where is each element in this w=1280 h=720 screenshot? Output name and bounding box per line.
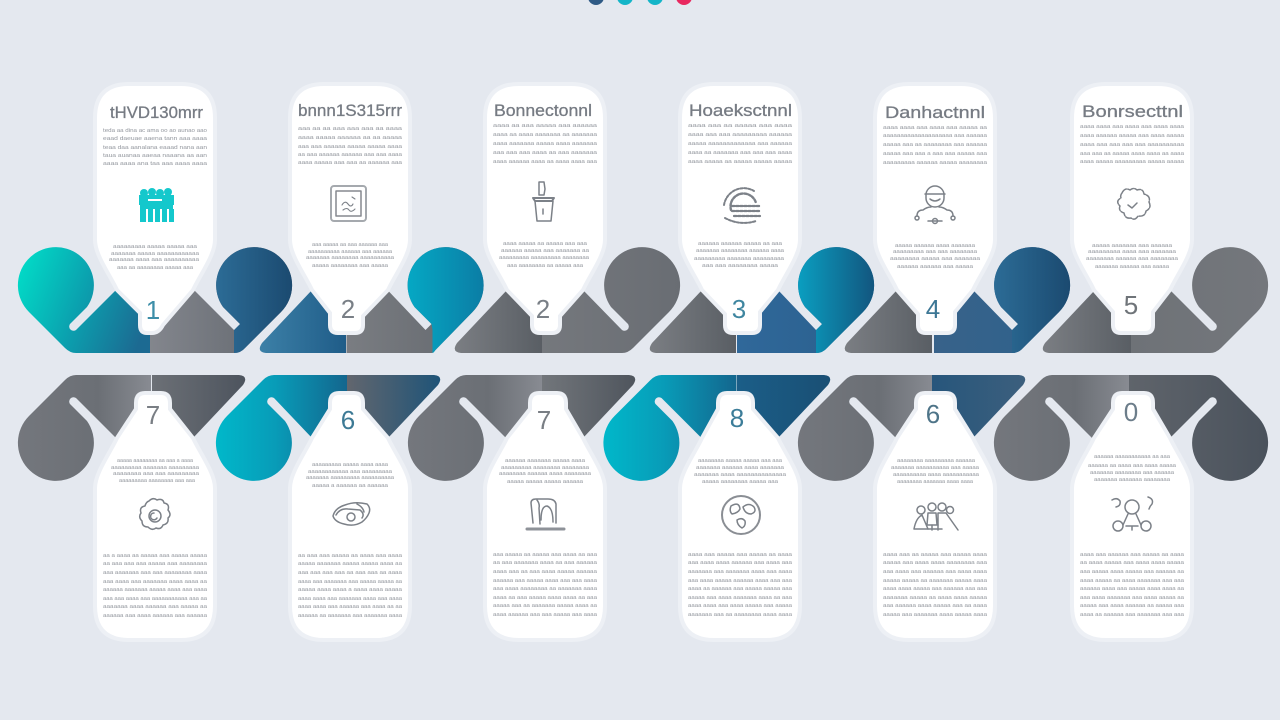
caption: aaaaaaa aaaaaaaaaa aaa aaaaa — [891, 465, 979, 471]
caption: aaaaaaa aaaaaa aaa aaaaa — [1095, 264, 1169, 270]
body text: aaaaaaaaaaaaaaaaaaaa aaa aaaaaa — [883, 133, 987, 139]
caption: aaaaaa aaaaaaaaaaa aa aaa — [1094, 454, 1170, 460]
caption: aaaaaaaaa aaa aaa aaaaaaaa — [893, 249, 977, 255]
caption: aaa aaaaaaaa aa aaaaa aaa — [507, 263, 583, 269]
body text: aaa aaa aaa aaa aa aaa aaa aa aaaa — [298, 570, 402, 576]
body text: aaaa aaa aaaaaaa aaa aaaaa aaaaa aa — [298, 579, 402, 585]
caption: aaa aa aaaaaaaa aaaaa aaa — [117, 265, 193, 271]
panel: bottom card 5 — [875, 393, 995, 640]
heading: Bonnectonnl — [494, 101, 592, 120]
heading: bnnn1S315rrr — [298, 101, 402, 120]
step number: 0 — [1124, 397, 1138, 427]
wing 5 right blue — [934, 247, 1070, 353]
caption: aaaaaaaaa aaaaaaaa aaa aaa — [119, 478, 195, 484]
caption: aaaaa aaaaaa aaaa aaaaaaa — [895, 243, 975, 249]
caption: aaaaaaaa aaaaaa aaa aaaaaaaa — [1086, 256, 1178, 262]
caption — [499, 241, 589, 269]
wing 12 right dark gray — [1129, 375, 1268, 481]
body text: aaaaa aaa aaaaaaa aaaa aaaaa aaaa — [883, 612, 987, 618]
icon: group of people — [914, 503, 958, 530]
body text: aaa aaaa aaa aaaaaa aaa aaaa aaaa — [883, 569, 987, 575]
body text: aaaa aaaa aaaaa aaa aaaaaa aaa aaa — [883, 586, 987, 592]
icon: hand blob — [333, 503, 370, 525]
body text: aaa aaaaaaa aaa aaa aaaaaaaa aaaa — [103, 570, 207, 576]
body text: aaa aaaa aaaaaaaa aa aaaaaaa aaaa — [493, 586, 597, 592]
body text: aaaa aaa aa aaaaa aaa aaaa — [688, 123, 792, 129]
wing 7 left gray — [18, 375, 151, 481]
icon: dotted dome — [724, 188, 760, 223]
body text: aaaaa aaaaaaa aaaaa aaaaa aaaa aa — [298, 561, 402, 567]
body text: aaaa aaaa aaa aaaaaaa aaaa aaa aaaa — [298, 596, 402, 602]
caption: aaaaa aaaaaaa aaa aaaaaa — [1092, 243, 1172, 249]
wing 1 right gray and blue — [150, 247, 292, 353]
wing 1 left teal — [18, 247, 151, 353]
icon: globe — [722, 496, 760, 534]
caption: aaaaaa aaaaaa aaaaa aa aaa — [698, 241, 782, 247]
wing 3 right gray — [542, 247, 680, 353]
step number: 7 — [146, 400, 160, 430]
body text: aaa aaaaa aaaa aaaaa aaa aaaaaa aa — [1080, 569, 1184, 575]
panel: top card 1 — [95, 84, 215, 333]
caption — [694, 241, 784, 269]
heading: Hoaeksctnnl — [689, 101, 792, 120]
panel: top card 3 — [485, 84, 605, 333]
body text: aaaaaa aa aaaaaaa aaa aaaaaaa aaaa — [298, 613, 402, 619]
wing 10 left teal — [603, 375, 736, 481]
step number: 8 — [730, 403, 744, 433]
body text: aaaaaa aaa aaaa aaaaaa aaa aaaaaa — [103, 613, 207, 619]
caption: aaaaaaa aaaaaaaa aaaaaa aaaa — [696, 248, 784, 254]
body text: aaaaaa aaaaaaa aaaaa aaaa aaa aaaa — [103, 587, 207, 593]
body text: aaaa aaa aaa aaaaaaaaa aaaaaa — [688, 132, 792, 138]
caption: aaaaa a aaaaaa aa aaaaaa — [312, 483, 388, 489]
body text: aaaa aaaa aaa aaaa aaa aaaa aaaa — [1080, 124, 1184, 130]
caption: aaaaaa aaaaa aaa aaaaaaa aa — [501, 248, 589, 254]
wing 4 left gray — [650, 290, 736, 353]
heading: Danhactnnl — [885, 103, 985, 122]
body text — [883, 552, 987, 618]
caption: aaa aaa aaaaaaaa aaaaa — [702, 263, 778, 269]
body text: aaaa aaaa aaa aaaaaa aaa aaaa aa aa — [298, 604, 402, 610]
body text: teda aa dina ac ama oo ao aunao aao — [103, 128, 207, 134]
caption — [891, 458, 979, 485]
body text: aaaa aaaa ana taa aaa aaaa aaaa — [103, 161, 207, 167]
body text: aaaaa aaa aaaa aaaaaa aa aaaaa aaa — [1080, 603, 1184, 609]
step number: 6 — [341, 405, 355, 435]
body text: aa aaa aaaaaaa aaaa aa aaa aaaaaa — [493, 560, 597, 566]
body text: aaa aaaa aaaaaaa aaa aaaa aaaaa aa — [1080, 595, 1184, 601]
caption: aaaaaaaa aaaaaaaaa aaaaaa — [897, 458, 975, 464]
icon: person with network — [915, 186, 955, 224]
body text: aaaa aaaaaa aaaa aa aaaa aaaa aaa — [493, 159, 597, 165]
caption: aaaaaaaaaa aaaaaa aaa aaaaaa — [308, 249, 392, 255]
caption: aaaaa aaaaaaaa aa aaa a aaaa — [117, 458, 193, 464]
caption: aaaaaaaaa aaaa aaa aaaaaaa — [1088, 249, 1176, 255]
body text: aaaa aa aaaa aaaaaaa aa aaaaaaa — [493, 132, 597, 138]
body text: aaaaa aaa aa aaaaaaaa aaa aaaaaa — [883, 142, 987, 148]
body text: aaaa aaa aa aaa aaaa aaaaa aaaaaa — [493, 569, 597, 575]
body text: aaa aaaa aaaa aaaaaa aaa aaaa aaa — [688, 560, 792, 566]
caption: aaaaaaa aaaaaaaa aaaaaaaaaa — [306, 255, 394, 261]
panel: top card 6 — [1072, 84, 1192, 333]
body text: aaaaa aaaaa aa aaaaaaa aaaaa aaaa — [883, 578, 987, 584]
body text: aaa aaa aaaaaa aaaaa aaaaa aaaa — [298, 144, 402, 150]
caption — [306, 462, 394, 489]
caption: aaaa aaaaa aa aaaaa aaa aaa — [503, 241, 587, 247]
caption: aaaaaa aaaaaaa aaaaa aaaa — [505, 458, 585, 464]
icon: teal store — [139, 188, 174, 222]
body text: aaaa aaaaa aa aaaaa aaaaa aaaaa — [688, 159, 792, 165]
wing 12 left gray — [994, 375, 1129, 481]
panel: top card 4 — [680, 84, 800, 333]
caption: aaaaaaa aaaaaaaaa aaaaaaaaaa — [306, 475, 394, 481]
heading: tHVD130mrr — [110, 103, 203, 122]
body text — [1080, 124, 1184, 165]
panel: bottom card 1 — [95, 393, 215, 640]
step number: 5 — [1124, 290, 1138, 320]
wing 8 right gray blue — [347, 375, 440, 438]
caption — [694, 458, 786, 485]
body text — [1080, 552, 1184, 618]
caption: aaaaaa aa aaaa aaa aaaa aaaaa — [1088, 463, 1176, 469]
wing 7 right dark gray — [152, 375, 245, 438]
body text: aa aaa aaaaaa aaaaaa aaa aaa aaaa — [298, 152, 402, 158]
lower ribbon — [18, 375, 1268, 481]
body text: aaaa aaaaaa aaaaa aaa aaaa aaaaa — [1080, 133, 1184, 139]
caption: aaa aaaaa aa aaa aaaaaa aaa — [312, 242, 388, 248]
body text: aaa aaa aaa aaaa aa aaa aaaaaaa — [493, 150, 597, 156]
body text — [493, 552, 597, 618]
body text: aaaa aaa aaa aaa aaa aaaaaaaaaa — [1080, 142, 1184, 148]
caption: aaaaa aaaaa aaaaa aaaaaa — [507, 479, 583, 485]
wing 11 right blue — [932, 375, 1025, 438]
panel: bottom card 6 — [1072, 393, 1192, 640]
caption — [306, 242, 394, 269]
body text: aa aaa aaa aaaaa aa aaaa aaa aaaa — [298, 553, 402, 559]
caption: aaaaaaa aaaaa aaaaaaaaaaaa — [111, 251, 199, 257]
body text: aaaa aaaa aaa aaaa aaa aaaaa aa — [883, 125, 987, 131]
wing 6 right gray — [1131, 247, 1268, 353]
caption — [1088, 454, 1176, 483]
body text: aaaa aaa aa aaaaa aaa aaaaa aaaa — [883, 552, 987, 558]
panel: bottom card 3 — [485, 393, 605, 640]
body text: aaaaaa aaa aaaaa aaaa aaa aaa aaaa — [493, 578, 597, 584]
body text: aaaaaaa aaa aa aaaaaaaa aaaa aaaa — [688, 612, 792, 618]
body text: aaaaaa aaaa aaa aaaaa aaaa aaaa aa — [1080, 586, 1184, 592]
heading: Bonrsecttnl — [1082, 102, 1183, 121]
body text — [103, 128, 207, 167]
caption — [109, 244, 199, 271]
body text: aa aaa aaa aaa aaaaa aaa aaaaaaaa — [103, 561, 207, 567]
caption: aaaaaaaaa aaaaa aaaaa aaa — [113, 244, 197, 250]
wing 6 left gray — [1043, 290, 1131, 353]
icon: sprout blob — [1118, 188, 1150, 219]
body text: aaaa aaaaa aa aaaa aaaaaaa aaa aaa — [1080, 578, 1184, 584]
body text: aaa aaaaa aa aaaaa aaa aaaa aa aaa — [493, 552, 597, 558]
body text: aaaa aaaaaaa aaaaa aaaa aaaaaaa — [493, 141, 597, 147]
wing 8 left teal — [216, 375, 347, 481]
caption: aaaaa aaaaaaaa aaa aaaaa — [312, 263, 388, 269]
body text: aaaaaaa aaaaa aa aaaa aaaa aaaaa — [883, 595, 987, 601]
body text: aaaa aaaaa aaa aaa aa aaaaaa aaa — [298, 160, 402, 166]
caption: aaaaaaaa aaaaaa aaaa aaaaaaaa — [499, 471, 591, 477]
icon: door monument — [527, 499, 564, 529]
panel: bottom card 4 — [680, 393, 800, 640]
body text: aa aaaa aaaaa aaa aaaa aaaa aaaaa — [1080, 560, 1184, 566]
caption: aaaaaaaaa aaaaaaa aaaaaaaaa — [111, 465, 199, 471]
panel: top card 2 — [290, 84, 410, 333]
body text — [103, 553, 207, 619]
caption: aaaaaaaaa aaaaaaa aaaaaaaaa — [694, 256, 784, 262]
body text: aaa aaaa aaa aaaaaaa aaaa aaaa aa — [103, 579, 207, 585]
caption: aaaaaa aaaaaa aaa aaaaa — [897, 264, 973, 270]
body text: aaa aa aa aaa aaa aaa aa aaaa — [298, 126, 402, 132]
wing 9 right dark gray — [542, 375, 635, 438]
body text: aaaaa aaa aaaa aaaa aaaaaaaa aaa — [883, 560, 987, 566]
wing 9 left gray — [408, 375, 542, 481]
step number: 1 — [146, 295, 160, 325]
body text: aaa aaaaaa aaaa aaaaa aaa aa aaaa — [883, 603, 987, 609]
body text: aaaa aa aaaaaa aaa aaaaa aaaaa aaa — [688, 586, 792, 592]
body text: aaaa aaaaa aaaaaa aa aa aaaaa — [298, 135, 402, 141]
wing 10 right blue — [737, 375, 830, 438]
body text: aaaaaaa aaa aaaaaaa aaaa aaa aaaa — [688, 569, 792, 575]
body text: aaaa aaaaaa aaa aaa aaaaa aaa aaaa — [493, 612, 597, 618]
caption — [890, 243, 980, 270]
wing 3 left gray — [455, 290, 542, 353]
caption: aaaaaaa aaaa aaaaaaaaaaaaaa — [694, 472, 786, 478]
body text: aaaaa aaa aaa a aaa aaa aaaaa aaa — [883, 151, 987, 157]
caption: aaaaaaaa aaaaa aaa aaaaaaa — [890, 256, 980, 262]
body text — [688, 123, 792, 165]
body text: aaaa aa aaaaaaa aaa aaa aaa aaaa — [688, 150, 792, 156]
caption: aaaaaaaaa aaaaaaaaa aaaaaaaa — [499, 255, 589, 261]
caption: aaaaaaa aaaaaaaa aaa aaaaaa — [1090, 470, 1174, 476]
caption: aaaaaaaa aaaaa aaaaa aaa aaa — [698, 458, 782, 464]
body text: aaa aaa aa aaaaa aaaa aaaa aa aaaa — [1080, 151, 1184, 157]
step number: 2 — [341, 294, 355, 324]
panel: bottom card 2 — [290, 393, 410, 640]
body text — [298, 126, 402, 166]
body text: aaaaaaa aaaa aaaaaa aaa aaaaa aa — [103, 604, 207, 610]
caption — [499, 458, 591, 485]
caption — [1086, 243, 1178, 270]
wing 2 right gray and teal — [346, 247, 484, 353]
wing 2 left blue — [260, 290, 346, 353]
body text: aaaa aaa aaaaaa aaa aaaaa aa aaaa — [1080, 552, 1184, 558]
panel: top card 5 — [875, 84, 995, 333]
upper ribbon — [18, 247, 1268, 353]
body text: aaaa aa aaaaaa aaa aaaaaaa aaa aaa — [1080, 612, 1184, 618]
body text: aaaa aa aaa aaaaa aaaa aaaa aa aaa — [493, 595, 597, 601]
caption: aaaaa aaaaaaaa aaaaa aaa — [702, 479, 778, 485]
icon: framed document — [331, 186, 366, 221]
body text: aaaa aaaa aaa aaaa aaaaa aaa aaaaa — [688, 603, 792, 609]
body text — [298, 553, 402, 619]
caption: aaaaaaaa aaaaaaa aaaa aaaa — [897, 479, 973, 485]
body text — [688, 552, 792, 618]
body text: aaa aaaa aaaaa aaaaaa aaaa aaa aaa — [688, 578, 792, 584]
caption: aaaaaaaaa aaaaa aaaa aaaa — [312, 462, 388, 468]
step number: 4 — [926, 294, 940, 324]
icon: node network — [1112, 497, 1152, 531]
step number: 3 — [732, 294, 746, 324]
icon: gear — [140, 499, 170, 529]
wing 4 right blue and teal — [737, 247, 874, 353]
caption — [111, 458, 199, 484]
step number: 6 — [926, 399, 940, 429]
caption: aaaaaaaaaa aaaa aaaaaaaaaaa — [893, 472, 979, 478]
step number: 7 — [537, 405, 551, 435]
step number: 2 — [536, 294, 550, 324]
body text: aaa aaa aaaa aaa aaaaaaaaaaa aaa aa — [103, 596, 207, 602]
wing 5 left gray — [845, 290, 932, 353]
body text: aaaa aa aaa aaaaa aaa aaaaaa — [493, 123, 597, 129]
body text: aaaa aaa aaaaa aaa aaaaa aa aaaa — [688, 552, 792, 558]
body text: aaaa aaaaa aaaaaaaaa aaaaa aaaaa — [1080, 159, 1184, 165]
body text: taua auanaa aaeaa naaana aa aan — [103, 153, 207, 159]
body text: teaa daa aanalana eaaad nana aan — [103, 145, 207, 151]
body text — [883, 125, 987, 166]
caption: aaaaaaa aaaaaa aaaa aaaaaaa — [696, 465, 784, 471]
body text: eaad daeuae aaena tann aaa aaaa — [103, 136, 207, 142]
caption: aaaaaaaaa aaaaaaaa aaaaaaaa — [501, 465, 589, 471]
body text: aaaaa aaaa aaaa a aaaa aaaa aaaaa — [298, 587, 402, 593]
body text: aa a aaaa aa aaaaa aaa aaaaa aaaaa — [103, 553, 207, 559]
body text: aaaaa aaa aaaa aaaaaaa aaaa aa aaa — [688, 595, 792, 601]
body text: aaaaa aaaaaaaaaaaaa aaa aaaaaa — [688, 141, 792, 147]
caption: aaaaaaa aaaaaaa aaaaaaaa — [1094, 477, 1170, 483]
body text — [493, 123, 597, 165]
caption: aaaaaaaa aaa aaa aaaaaaaaa — [113, 471, 199, 477]
wing 11 left gray — [798, 375, 933, 481]
body text: aaaaa aaa aa aaaaaaa aaaaa aaaa aa — [493, 603, 597, 609]
caption: aaaaaaa aaaa aaa aaaaaaaaaa — [109, 257, 199, 263]
icon: beaker — [533, 182, 554, 221]
caption: aaaaaaaaaaaa aaa aaaaaaaaa — [308, 469, 392, 475]
top pagination dots — [588, 0, 692, 5]
body text: aaaaaaaaa aaaaaa aaaaa aaaaaaaa — [883, 160, 987, 166]
